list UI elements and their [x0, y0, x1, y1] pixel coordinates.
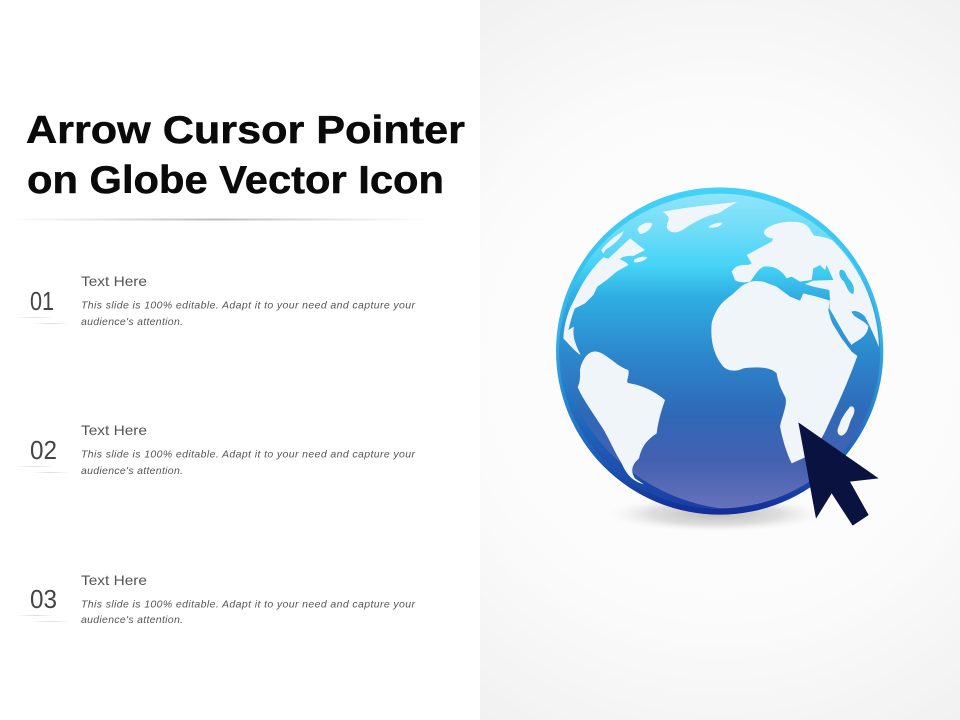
description 03: This slide is 100% editable. Adapt it to your need and capture your	[81, 598, 415, 610]
Eurasia	[732, 222, 880, 350]
globe sphere	[556, 187, 883, 515]
description 02: audience's attention.	[81, 465, 183, 477]
description 03	[81, 598, 415, 626]
number 02: 02	[30, 435, 57, 465]
title: Arrow Cursor Pointer	[26, 109, 465, 152]
Greenland	[663, 202, 737, 232]
globe shadow	[608, 496, 824, 532]
Arctic islands	[601, 231, 624, 253]
number 01: 01	[30, 286, 54, 316]
heading 01: Text Here	[81, 273, 147, 289]
icon: globe with cursor	[556, 187, 883, 526]
description 02	[81, 448, 415, 477]
item 02	[16, 422, 415, 477]
item 01	[16, 273, 415, 328]
right panel background	[480, 0, 960, 720]
South America	[578, 351, 665, 484]
heading 02: Text Here	[81, 422, 147, 438]
title	[26, 109, 465, 202]
Africa	[711, 281, 857, 463]
description 02: This slide is 100% editable. Adapt it to your need and capture your	[81, 448, 415, 460]
continents	[563, 202, 880, 484]
arrow cursor	[798, 422, 879, 526]
North America	[563, 238, 645, 355]
number 03: 03	[30, 584, 57, 614]
heading 03: Text Here	[81, 572, 147, 588]
description 01	[81, 300, 415, 328]
item 03	[16, 572, 415, 626]
left panel background	[0, 0, 480, 720]
title: on Globe Vector Icon	[27, 159, 444, 202]
description 03: audience's attention.	[81, 614, 183, 626]
Caspian Sea	[839, 270, 854, 294]
Madagascar	[838, 406, 854, 436]
description 01: audience's attention.	[81, 316, 183, 328]
description 01: This slide is 100% editable. Adapt it to your need and capture your	[81, 300, 415, 312]
